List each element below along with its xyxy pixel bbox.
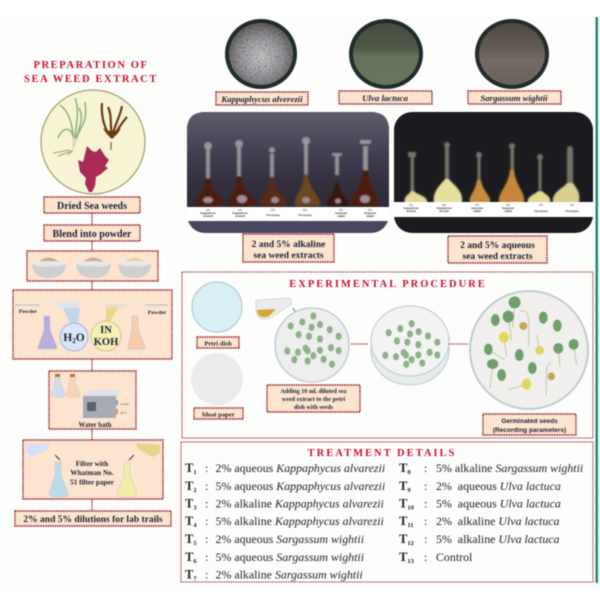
list: T8 to T13: :: [424, 479, 427, 493]
list: T1 to T7: 7: [193, 576, 197, 582]
list: T1 to T7: T: [185, 550, 193, 564]
list: T8 to T13: :: [424, 550, 427, 564]
circle: H2O: O: [76, 332, 85, 344]
photo: alkaline extracts: 5%: [238, 209, 242, 212]
caption: aqueous extracts: [448, 236, 547, 263]
list: T1 to T7: :: [205, 568, 208, 582]
list: T8 to T13: 5% alkaline Ulva lactuca: [436, 532, 560, 546]
photo: aqueous extracts: Sargassum: [471, 207, 484, 210]
list: T8 to T13: 2% alkaline Ulva lactuca: [436, 514, 560, 528]
list: T8 to T13: T: [399, 514, 407, 528]
box: blend into powder: Blend into powder: [53, 229, 132, 240]
panel: solvent mixing: [13, 290, 172, 359]
list: T8 to T13: 2% aqueous Ulva lactuca: [436, 479, 561, 493]
list: T8 to T13: 8: [407, 469, 411, 476]
list: T1 to T7: T: [185, 496, 193, 510]
photo: alkaline extracts: 2%: [339, 209, 343, 212]
list: T1 to T7: 5% alkaline Kappaphycus alvarezii: [216, 514, 384, 528]
label: adding extract: weed extract to the petri: [282, 397, 345, 403]
photo: aqueous extracts: 2%: [539, 204, 543, 207]
list: T8 to T13: Control: [436, 550, 473, 564]
list: T1 to T7: T: [185, 461, 193, 475]
list: T1 to T7: 5% aqueous Sargassum wightii: [216, 550, 364, 564]
dish with seeds: [275, 308, 349, 382]
photo: alkaline extracts: 2%: [206, 209, 210, 212]
arrow: [351, 343, 368, 345]
label: Sargassum: Sargassum wightii: [480, 93, 548, 103]
photo: aqueous extracts: 5%: [506, 204, 510, 207]
label: Ulva: [339, 91, 432, 104]
list: T8 to T13: 10: [407, 504, 414, 512]
powder dish: Sargassum: [475, 19, 549, 89]
photo: aqueous extracts: Kappaphycus: [403, 207, 419, 210]
panel: experimental procedure: [182, 272, 593, 438]
label: blot paper: [194, 408, 243, 419]
list: T1 to T7: :: [205, 479, 208, 493]
label: Kappaphycus: [216, 92, 308, 105]
list: T1 to T7: 5: [193, 540, 197, 547]
circle: H2O: [60, 323, 88, 351]
caption: alkaline extracts: sea weed extracts: [253, 251, 324, 261]
list: T1 to T7: 2: [193, 487, 197, 494]
photo: alkaline extracts: wightii: [366, 215, 374, 218]
photo: aqueous extracts: Kappaphycus: [436, 207, 452, 210]
label: adding extract: Adding 10 ml. diluted sea: [280, 389, 347, 395]
photo: aqueous extracts: 5%: [442, 204, 446, 207]
list: T8 to T13: :: [424, 514, 427, 528]
icon: blot paper: [191, 353, 243, 405]
label: adding extract: dish with seeds: [294, 405, 334, 411]
box: dilutions: [15, 511, 171, 526]
label: Kappaphycus: Kappaphycus alverezii: [220, 94, 303, 104]
photo: alkaline extracts: wightii: [337, 215, 345, 218]
photo: alkaline extracts: Kappaphycus: [200, 212, 216, 215]
title: preparation of sea weed extract: PREPARATION OF: [33, 60, 149, 71]
list: T8 to T13: 12: [407, 540, 414, 547]
list: T1 to T7: [185, 461, 385, 582]
list: T8 to T13: 11: [407, 522, 414, 529]
panel: filter: Whatman No.: [70, 469, 114, 477]
panel: solvent mixing: Powder: [19, 309, 38, 315]
list: T8 to T13: T: [399, 550, 407, 564]
photo: aqueous extracts: Ulva lactuca: [565, 210, 580, 213]
title: preparation of sea weed extract: SEA WEED EXTRACT: [24, 74, 158, 85]
arrow: [449, 343, 468, 345]
photo: alkaline extracts: 5%: [303, 209, 307, 212]
teal side rule: [596, 17, 598, 583]
photo: aqueous extracts: 5%: [570, 204, 574, 207]
list: T1 to T7: T: [185, 514, 193, 528]
panel: treatment details: [181, 442, 593, 582]
circle: IN KOH: IN: [100, 325, 112, 336]
photo: alkaline extracts: Ulva lactuca: [298, 214, 313, 217]
caption: aqueous extracts: sea weed extracts: [462, 252, 533, 262]
list: T8 to T13: :: [424, 461, 427, 475]
list: T8 to T13: T: [399, 479, 407, 493]
list: T8 to T13: [399, 461, 583, 565]
photo: alkaline extracts: Sargassum: [335, 212, 348, 215]
heading: experimental procedure: EXPERIMENTAL PROCEDURE: [289, 279, 487, 290]
list: T1 to T7: 1: [193, 469, 197, 476]
photo: aqueous extracts: wightii: [504, 210, 512, 213]
list: T1 to T7: :: [205, 461, 208, 475]
label: adding extract: [267, 385, 360, 412]
list: T1 to T7: 5% aqueous Kappaphycus alvarezii: [216, 479, 385, 493]
list: T1 to T7: 4: [193, 522, 197, 529]
list: T1 to T7: T: [185, 568, 193, 582]
photo: aqueous extracts: 2%: [475, 204, 479, 207]
panel: filter: Filter with: [76, 460, 108, 468]
caption: alkaline extracts: [243, 234, 334, 262]
panel: water bath: [49, 371, 136, 429]
powder dish: Ulva: [349, 19, 423, 89]
list: T1 to T7: :: [205, 496, 208, 510]
panel: water bath: 50 °C: [120, 411, 127, 415]
list: T8 to T13: T: [399, 461, 407, 475]
photo: alkaline extracts: [187, 112, 389, 233]
photo: aqueous extracts: 2%: [409, 204, 413, 207]
list: T1 to T7: T: [185, 532, 193, 546]
photo: alkaline extracts: alvarezii: [235, 215, 245, 218]
label: petri dish: [197, 337, 239, 348]
panel: water bath: 2 hours: [120, 402, 130, 406]
list: T8 to T13: :: [424, 532, 427, 546]
panel: solvent mixing: Powder: [148, 310, 167, 316]
list: T8 to T13: 13: [407, 558, 415, 565]
panel: filter: [23, 440, 163, 499]
circle: IN KOH: [91, 321, 121, 351]
circle: H2O: 2: [72, 337, 76, 345]
list: T8 to T13: 9: [407, 487, 411, 494]
circle: H2O: H: [63, 332, 72, 344]
list: T1 to T7: 2% aqueous Kappaphycus alvarezii: [216, 461, 385, 475]
photo: alkaline extracts: 5%: [368, 209, 372, 212]
list: T1 to T7: T: [185, 479, 193, 493]
label: blot paper: bloat paper: [202, 412, 235, 418]
circle: IN KOH: KOH: [94, 337, 118, 348]
label: germinated seeds: (Recording parameters): [493, 427, 566, 434]
caption: aqueous extracts: 2 and 5% aqueous: [460, 241, 535, 251]
photo: aqueous extracts: Ulva lactuca: [534, 210, 549, 213]
photo: aqueous extracts: wightii: [473, 210, 481, 213]
photo: aqueous extracts: alvarezii: [439, 210, 449, 213]
photo: aqueous extracts: [394, 112, 593, 233]
photo: aqueous extracts: Sargassum: [502, 207, 515, 210]
label: germinated seeds: Germinated seeds: [501, 418, 558, 425]
box: blend into powder: [44, 225, 140, 241]
photo: alkaline extracts: alvarezii: [203, 215, 213, 218]
title: preparation of sea weed extract: [24, 60, 158, 85]
list: T1 to T7: 3: [193, 504, 197, 512]
panel: water bath: Water bath: [79, 422, 112, 429]
photo: alkaline extracts: 2%: [271, 209, 275, 212]
list: T1 to T7: :: [205, 514, 208, 528]
box: dried sea weeds: Dried Sea weeds: [57, 201, 127, 212]
illustration: seaweed circle: [41, 90, 145, 194]
label: germinated seeds: [483, 414, 576, 435]
label: petri dish: Petri dish: [204, 340, 232, 348]
list: T8 to T13: 5% aqueous Ulva lactuca: [436, 496, 561, 510]
box: dried sea weeds: [44, 197, 140, 213]
closed dish with seeds: [371, 306, 449, 385]
photo: alkaline extracts: Kappaphycus: [232, 212, 248, 215]
list: T8 to T13: :: [424, 496, 427, 510]
heading: treatment details: TREATMENT DETAILS: [308, 448, 456, 459]
list: T8 to T13: T: [399, 532, 407, 546]
photo: aqueous extracts: alvarezii: [406, 210, 416, 213]
label: Sargassum: [468, 91, 561, 104]
list: T8 to T13: 5% alkaline Sargassum wightii: [436, 461, 583, 475]
photo: alkaline extracts: Ulva lactuca: [266, 214, 281, 217]
icon: petri dish: [192, 282, 242, 332]
icon: pouring flask: [256, 298, 298, 319]
photo: alkaline extracts: Sargassum: [364, 212, 377, 215]
box: dilutions: 2% and 5% dilutions for lab trails: [23, 515, 163, 525]
panel: powder bowls: [27, 251, 158, 281]
panel: filter: 51 filter paper: [70, 478, 115, 486]
list: T1 to T7: :: [205, 550, 208, 564]
caption: alkaline extracts: 2 and 5% alkaline: [252, 240, 325, 250]
list: T1 to T7: 2% alkaline Sargassum wightii: [216, 568, 363, 582]
list: T1 to T7: 2% aqueous Sargassum wightii: [216, 532, 364, 546]
powder dish: Kappaphycus: [225, 19, 297, 89]
list: T1 to T7: :: [205, 532, 208, 546]
list: T1 to T7: 6: [193, 558, 197, 565]
list: T8 to T13: T: [399, 496, 407, 510]
dish with germinated seeds: [470, 291, 588, 409]
label: Ulva: Ulva lactuca: [362, 93, 408, 103]
list: T1 to T7: 2% alkaline Kappaphycus alvarezii: [216, 496, 384, 510]
